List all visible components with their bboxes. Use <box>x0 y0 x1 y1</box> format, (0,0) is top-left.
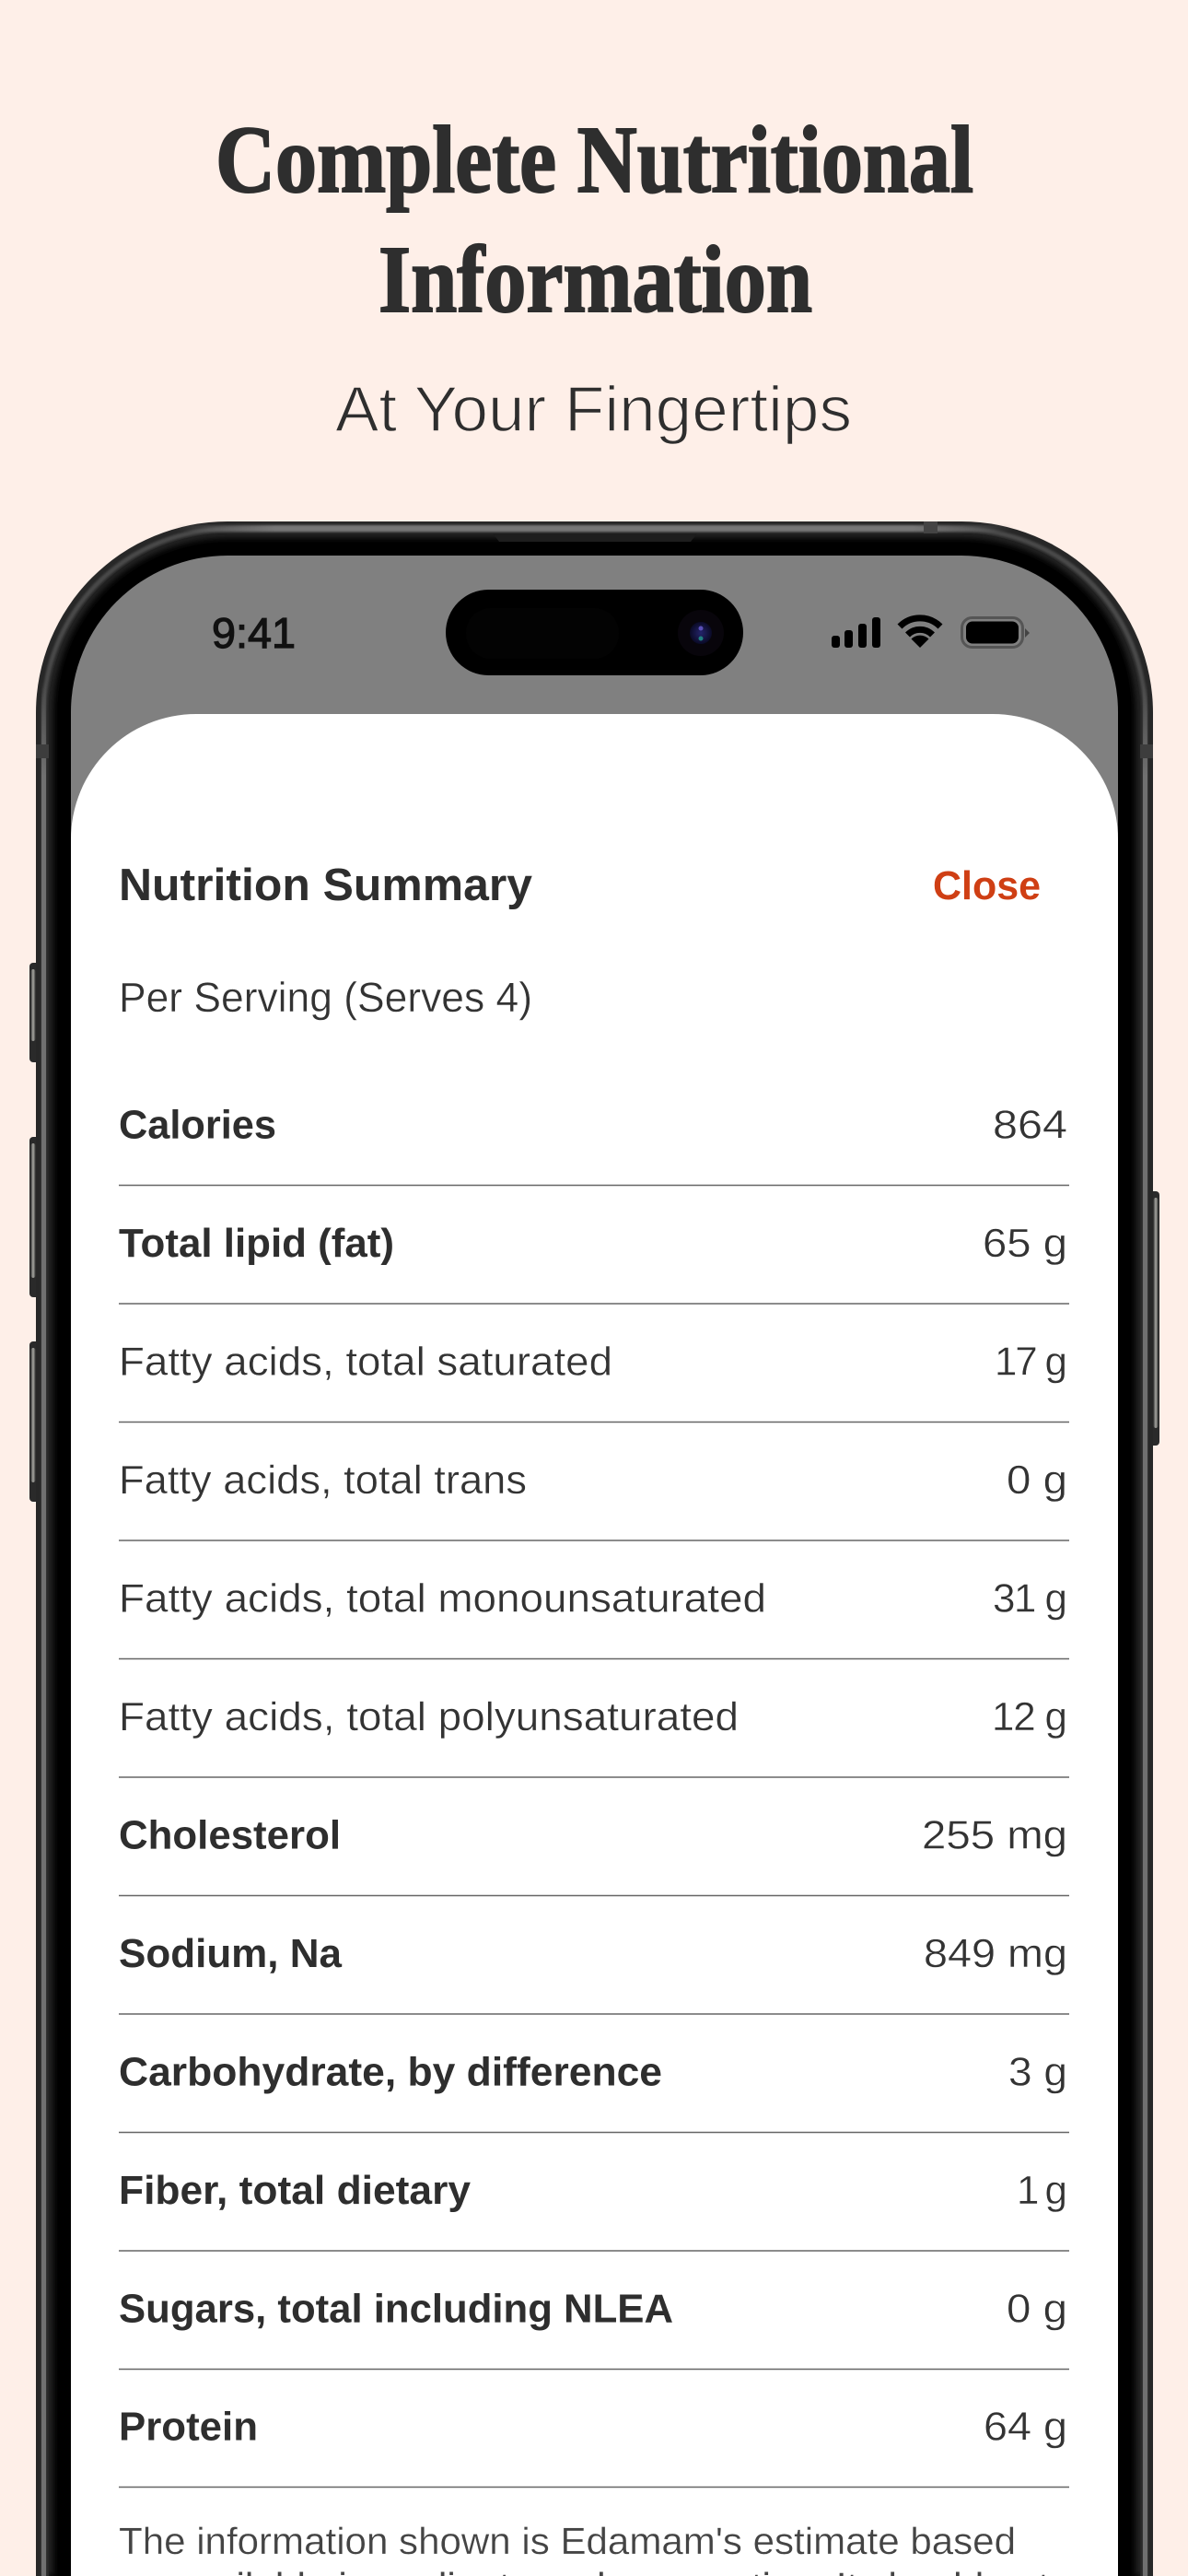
row: sugars: 0 g <box>1007 2287 1067 2331</box>
row: polyunsaturated fat <box>119 1694 1069 1777</box>
row: sodium <box>119 1931 1069 2014</box>
row: monounsaturated fat <box>119 1575 1069 1658</box>
row: protein: Protein <box>119 2405 258 2449</box>
row: trans fat: Fatty acids, total trans <box>119 1458 527 1503</box>
serving note: Per Serving (Serves 4) <box>119 974 532 1021</box>
status bar time: 9:41 <box>212 609 296 657</box>
row: calories: 864 <box>993 1102 1067 1148</box>
row: sodium: 849 mg <box>924 1931 1067 1976</box>
icon: cellular signal <box>832 617 880 648</box>
row: total lipid: Total lipid (fat) <box>119 1221 394 1266</box>
row: cholesterol <box>119 1813 1069 1896</box>
row: carbohydrate: 3 g <box>1008 2049 1067 2095</box>
icon: wifi <box>900 618 940 648</box>
row: polyunsaturated fat: Fatty acids, total polyunsaturated <box>119 1694 739 1739</box>
row: fiber <box>119 2168 1069 2251</box>
row: fiber: 1 g <box>1017 2168 1067 2213</box>
row: carbohydrate: Carbohydrate, by difference <box>119 2049 662 2095</box>
title <box>215 107 973 333</box>
row: sodium: Sodium, Na <box>119 1931 343 1976</box>
row: trans fat: 0 g <box>1007 1458 1067 1503</box>
row: polyunsaturated fat: 12 g <box>992 1694 1067 1739</box>
dynamic island <box>446 590 743 675</box>
disclaimer text: The information shown is Edamam's estimate based <box>119 2520 1016 2562</box>
row: protein <box>119 2405 1069 2488</box>
row: total lipid: 65 g <box>983 1221 1067 1266</box>
row: monounsaturated fat: 31 g <box>993 1575 1067 1622</box>
row: protein: 64 g <box>984 2405 1067 2449</box>
row: saturated fat: 17 g <box>995 1340 1067 1384</box>
subtitle: At Your Fingertips <box>335 373 852 445</box>
title: Complete Nutritional <box>215 107 973 213</box>
row: cholesterol: Cholesterol <box>119 1813 341 1857</box>
title: Information <box>379 227 812 333</box>
row: trans fat <box>119 1458 1069 1540</box>
row: carbohydrate <box>119 2049 1069 2132</box>
row: calories: Calories <box>119 1102 276 1148</box>
row: cholesterol: 255 mg <box>922 1813 1067 1857</box>
row: saturated fat <box>119 1340 1069 1423</box>
icon: battery <box>961 617 1030 647</box>
icon: phone side buttons <box>29 963 1159 1502</box>
row: fiber: Fiber, total dietary <box>119 2168 472 2213</box>
phone screen status area <box>71 556 1118 2576</box>
sheet heading: Nutrition Summary <box>119 861 532 910</box>
panel: nutrition summary sheet <box>71 714 1118 2576</box>
row: sugars: Sugars, total including NLEA <box>119 2287 673 2331</box>
row: sugars <box>119 2287 1069 2370</box>
row: monounsaturated fat: Fatty acids, total monounsaturated <box>119 1575 766 1622</box>
row: calories <box>119 1102 1069 1185</box>
row: saturated fat: Fatty acids, total saturated <box>119 1340 612 1384</box>
phone frame <box>36 521 1153 2576</box>
row: total lipid <box>119 1221 1069 1304</box>
close button: Close <box>933 863 1041 908</box>
